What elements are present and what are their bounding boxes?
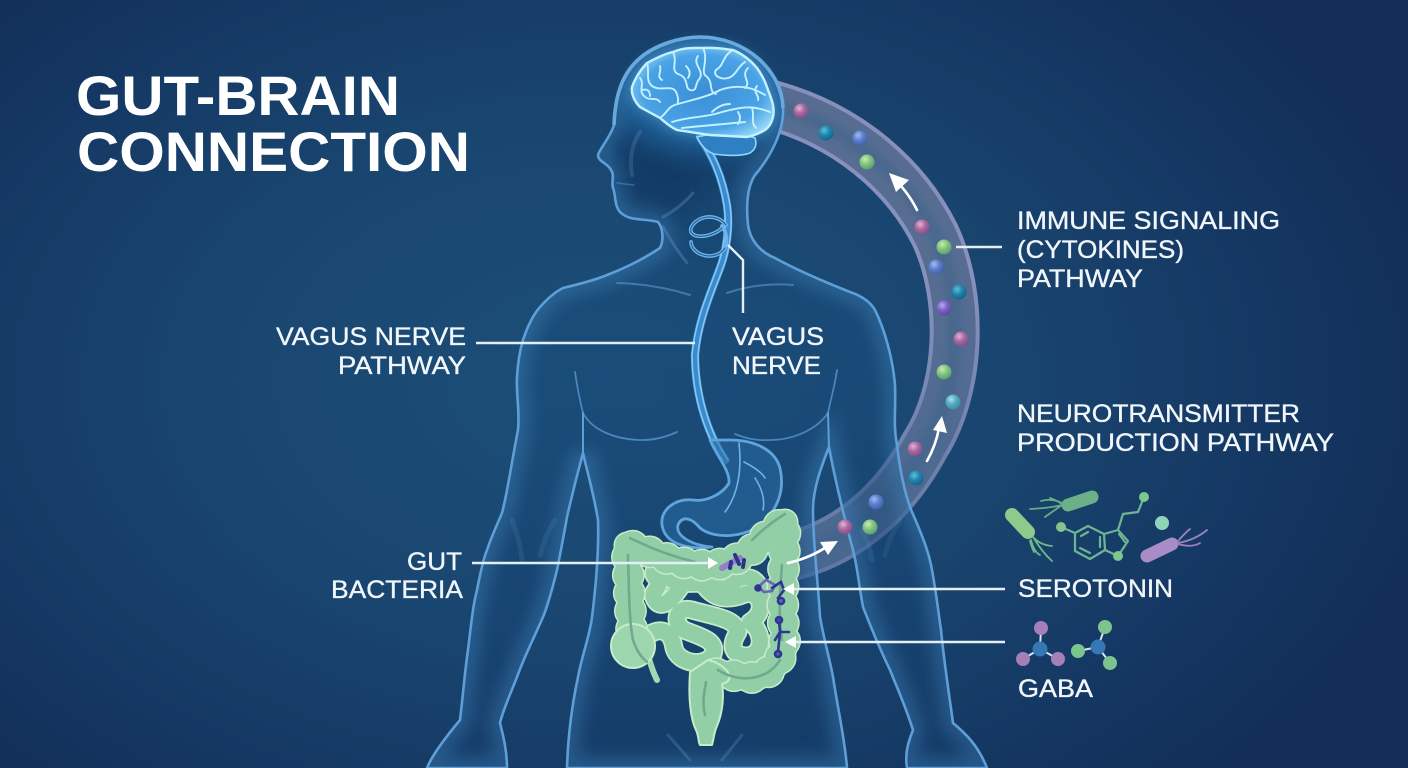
label: neurotransmitter production: PRODUCTION PATHWAY <box>1017 429 1334 457</box>
label: vagus nerve <box>728 245 824 380</box>
label: GABA <box>785 636 1093 703</box>
cerebrum <box>632 48 774 137</box>
brain folds <box>640 48 770 128</box>
gut bacteria marks <box>722 555 744 568</box>
green bacterium <box>1012 515 1052 561</box>
label: GABA: GABA <box>1018 675 1093 703</box>
rectum <box>689 660 729 745</box>
label: vagus nerve: NERVE <box>732 352 821 380</box>
GABA marks <box>775 617 789 657</box>
small intestine <box>650 572 762 663</box>
label: neurotransmitter production: NEUROTRANSMITTER <box>1017 400 1300 428</box>
label: vagus nerve pathway: PATHWAY <box>338 352 466 380</box>
title: CONNECTION <box>77 120 470 183</box>
appendix <box>648 655 657 680</box>
label: gut bacteria: GUT <box>407 548 462 576</box>
label: serotonin <box>783 575 1173 603</box>
brain glow <box>632 48 774 137</box>
label: immune signaling <box>956 207 1280 293</box>
title: GUT-BRAIN <box>76 64 400 127</box>
body muscle and crease lines <box>512 132 900 760</box>
icon: GABA molecules <box>1016 620 1117 670</box>
title <box>76 64 470 183</box>
purple bacterium <box>1147 529 1207 556</box>
brain <box>632 48 774 155</box>
label: vagus nerve pathway <box>276 323 695 380</box>
label: serotonin: SEROTONIN <box>1018 575 1173 603</box>
mint dot <box>1155 516 1169 530</box>
cecum <box>611 624 655 668</box>
teal-green bacterium <box>1030 497 1092 517</box>
arrow: colon to tube <box>788 541 838 563</box>
pathway molecules (cytokines) <box>794 104 968 534</box>
arrow: lower tube <box>927 416 947 461</box>
serotonin structure <box>1056 492 1149 561</box>
head outline highlight <box>614 37 783 125</box>
large intestine <box>627 522 785 682</box>
label: vagus nerve pathway: VAGUS NERVE <box>276 323 466 351</box>
label: immune signaling: (CYTOKINES) <box>1017 236 1184 264</box>
purple molecule <box>1016 621 1065 666</box>
colon centre lines <box>628 514 785 715</box>
stomach <box>662 440 782 548</box>
label: immune signaling: IMMUNE SIGNALING <box>1017 207 1280 235</box>
serotonin marks <box>756 580 784 604</box>
cerebellum and brainstem <box>697 130 756 155</box>
arrow: upper tube <box>889 173 917 210</box>
icon: bacteria and serotonin molecule <box>1012 492 1207 561</box>
green molecule <box>1071 620 1117 670</box>
immune pathway tube <box>760 102 955 557</box>
label: vagus nerve: VAGUS <box>732 323 824 351</box>
label: neurotransmitter production <box>1017 400 1334 457</box>
gut organs <box>611 514 789 745</box>
human body outline <box>427 33 987 768</box>
vagus nerve <box>691 137 731 460</box>
label: gut bacteria: BACTERIA <box>331 576 463 604</box>
label: immune signaling: PATHWAY <box>1017 265 1143 293</box>
label: gut bacteria <box>331 548 718 604</box>
